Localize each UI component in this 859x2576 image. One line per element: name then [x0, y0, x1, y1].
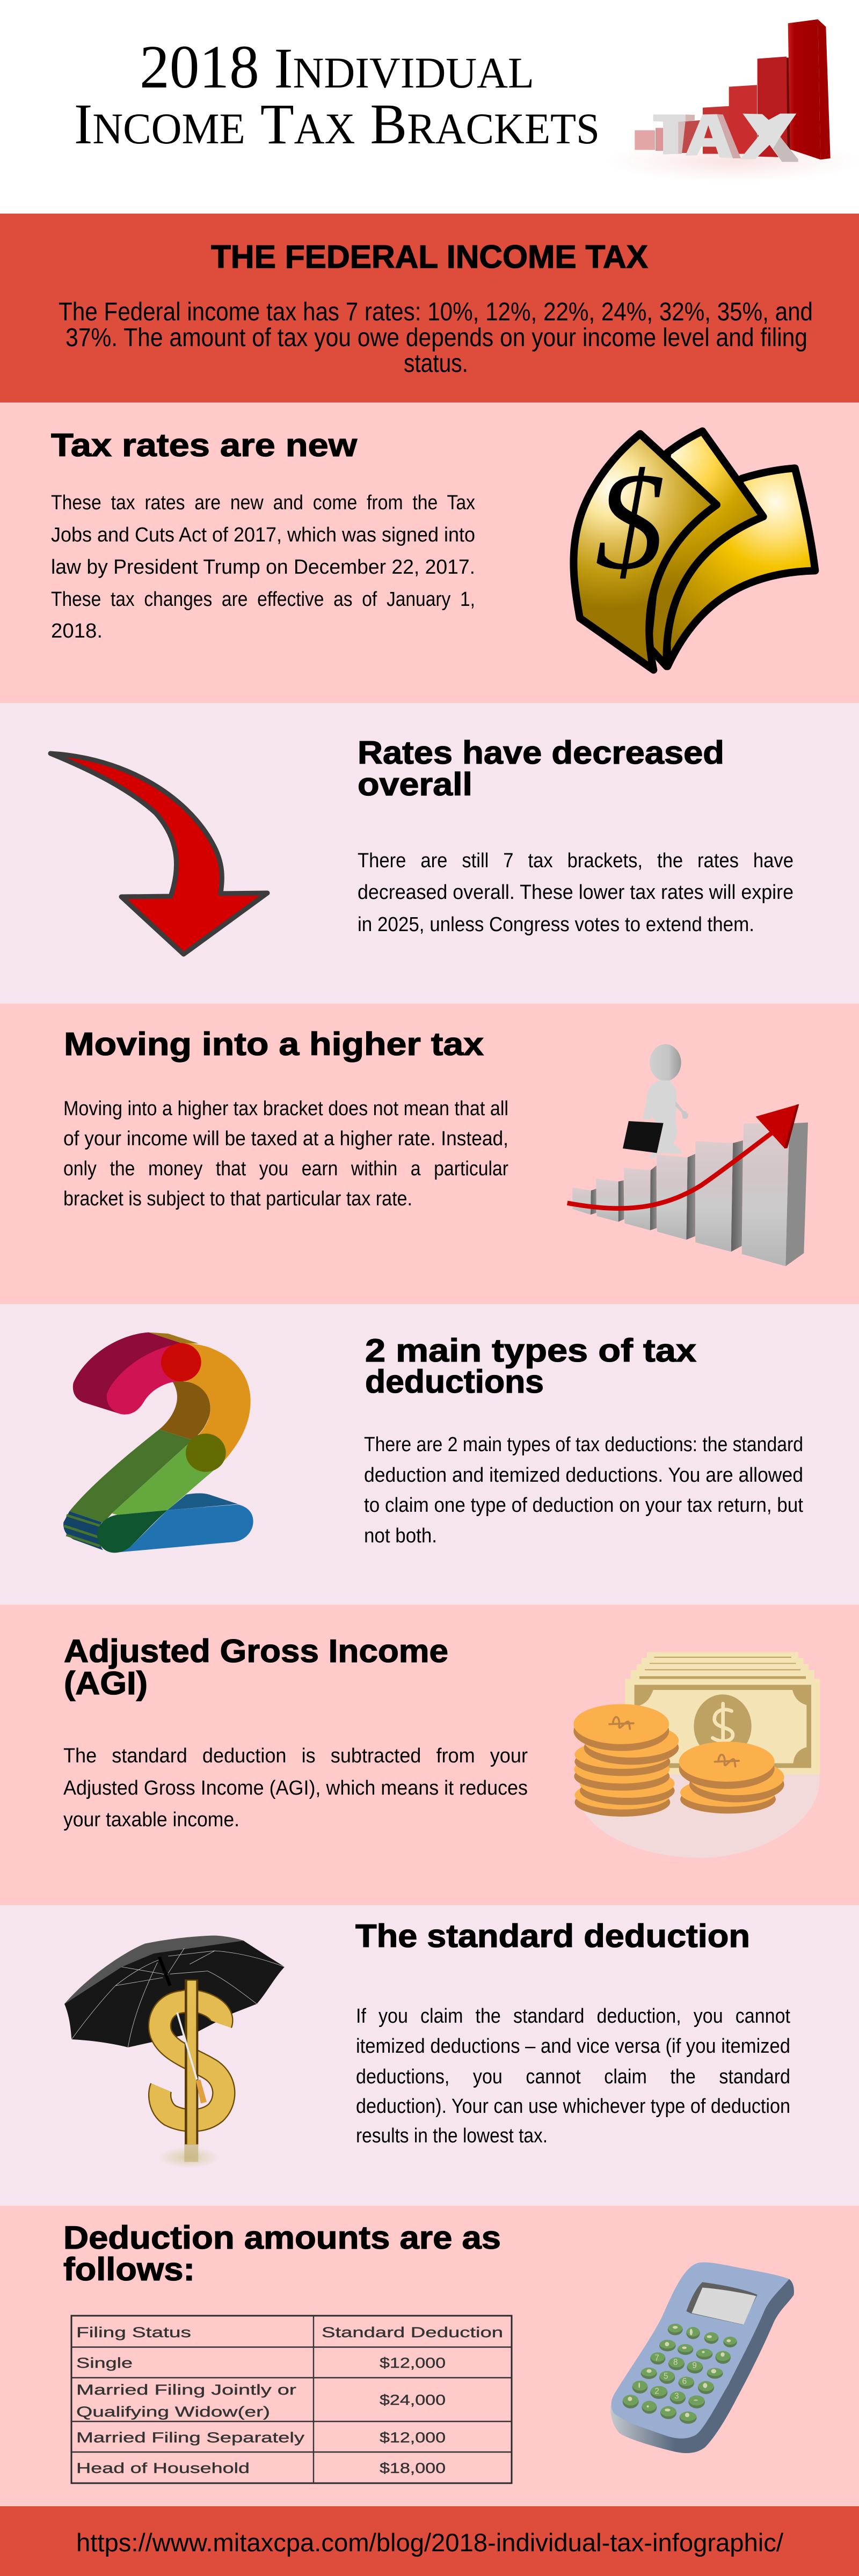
keypad symbols: 3 — [674, 2391, 679, 2401]
panel: rates have decreased overall — [0, 703, 859, 1004]
icon: colorful number 2 — [63, 1333, 253, 1553]
panel: deduction amounts — [0, 2206, 859, 2506]
heading: THE FEDERAL INCOME TAX — [211, 239, 648, 275]
body text: of your income will be taxed at a higher rate. Instead, — [63, 1128, 508, 1150]
heading: Rates have decreased — [358, 735, 724, 771]
panel: moving into a higher tax — [0, 1004, 859, 1304]
heading: Deduction amounts are as — [63, 2220, 501, 2256]
body text — [63, 1745, 528, 1831]
figure — [643, 1044, 688, 1159]
body text: There are 2 main types of tax deductions: the standard — [364, 1433, 803, 1456]
heading — [358, 735, 724, 802]
table: standard deduction by filing status: Filing Status — [76, 2324, 191, 2340]
keypad — [623, 2324, 737, 2424]
heading: overall — [358, 766, 472, 802]
title: Income Tax Brackets — [74, 88, 600, 157]
body text — [51, 492, 475, 642]
icon: blue calculator — [610, 2263, 794, 2453]
body text: in 2025, unless Congress votes to extend them. — [358, 913, 754, 936]
keypad symbols — [628, 2326, 731, 2417]
keypad symbols: 6 — [682, 2377, 687, 2386]
heading: Adjusted Gross Income — [64, 1633, 448, 1669]
banknotes — [625, 1652, 820, 1774]
red growth arrow — [567, 1104, 799, 1209]
table: standard deduction by filing status: $12,000 — [380, 2429, 446, 2446]
left coin stack — [573, 1704, 679, 1817]
body text: Jobs and Cuts Act of 2017, which was signed into — [51, 524, 475, 546]
icon: umbrella over gold dollar sign — [64, 1936, 285, 2168]
panel: footer — [0, 2506, 859, 2576]
keypad symbols: 8 — [673, 2358, 678, 2367]
title — [74, 32, 600, 157]
panel: header — [0, 0, 859, 214]
body text: Moving into a higher tax bracket does not mean that all — [63, 1097, 508, 1120]
keypad symbols: 2 — [654, 2387, 659, 2396]
body text: law by President Trump on December 22, 2017. — [51, 556, 475, 579]
icon: TAX bar chart — [605, 19, 859, 182]
panel: the standard deduction — [0, 1905, 859, 2206]
table: standard deduction by filing status: Standard Deduction — [322, 2324, 503, 2340]
body text: The standard deduction is subtracted from your — [63, 1745, 528, 1767]
body text: deduction and itemized deductions. You are allowed — [364, 1464, 803, 1487]
heading: (AGI) — [64, 1665, 148, 1701]
heading: The standard deduction — [355, 1918, 750, 1954]
panel: adjusted gross income — [0, 1605, 859, 1905]
icon part: letter X — [740, 114, 798, 162]
panel: the federal income tax — [0, 214, 859, 402]
body text: These tax rates are new and come from the Tax — [51, 492, 475, 514]
body text: deductions, you cannot claim the standard — [356, 2066, 790, 2088]
heading: Moving into a higher tax — [64, 1026, 484, 1062]
body text: These tax changes are effective as of January 1, — [51, 588, 475, 611]
table: standard deduction by filing status: $12,000 — [380, 2355, 446, 2371]
table: standard deduction by filing status — [71, 2316, 512, 2483]
table: standard deduction by filing status: $18,000 — [380, 2460, 446, 2476]
table: standard deduction by filing status: Head of Household — [76, 2460, 250, 2476]
gold dollar sign — [159, 1979, 224, 2145]
table: standard deduction by filing status: Married Filing Jointly or — [76, 2382, 296, 2398]
body text: not both. — [364, 1525, 437, 1547]
heading: deductions — [365, 1364, 544, 1400]
heading: Tax rates are new — [51, 427, 357, 463]
body text: results in the lowest tax. — [356, 2125, 548, 2147]
icon: figure climbing bar chart with red arrow — [567, 1044, 808, 1266]
heading — [365, 1333, 696, 1400]
heading — [63, 2220, 501, 2287]
table: standard deduction by filing status: Single — [76, 2355, 133, 2371]
icon: gold dollar bills — [573, 431, 815, 670]
body text — [63, 1097, 508, 1210]
body text: bracket is subject to that particular tax rate. — [63, 1188, 412, 1210]
panel: 2 main types of tax deductions — [0, 1304, 859, 1605]
heading — [64, 1633, 448, 1701]
body text: to claim one type of deduction on your tax return, but — [364, 1494, 803, 1517]
briefcase — [623, 1121, 664, 1153]
intro text — [59, 298, 813, 378]
heading: follows: — [63, 2251, 195, 2287]
keypad symbols: 9 — [692, 2361, 697, 2370]
body text: 2018. — [51, 620, 103, 642]
body text: There are still 7 tax brackets, the rates have — [358, 850, 794, 872]
umbrella handle — [177, 2012, 207, 2103]
source url: https://www.mitaxcpa.com/blog/2018-individual-tax-infographic/ — [76, 2528, 784, 2557]
dollar sign: $ — [595, 444, 665, 598]
keypad symbols: 5 — [664, 2372, 668, 2381]
body text: If you claim the standard deduction, you cannot — [356, 2005, 790, 2028]
icon part: letter T — [653, 114, 695, 155]
icon: red down arrow — [50, 753, 267, 954]
panel: tax rates are new — [0, 402, 859, 703]
heading: 2 main types of tax — [365, 1333, 696, 1368]
intro text: status. — [404, 349, 468, 378]
screen — [686, 2282, 758, 2325]
table: standard deduction by filing status: Qualifying Widow(er) — [76, 2404, 270, 2420]
title: 2018 Individual — [140, 32, 534, 101]
keypad symbols: 7 — [654, 2354, 659, 2363]
icon: banknotes and coin stacks — [573, 1652, 820, 1858]
body text — [358, 850, 794, 936]
table: standard deduction by filing status: $24,000 — [380, 2392, 446, 2408]
icon part: letter A — [686, 114, 741, 158]
body text — [356, 2005, 790, 2147]
table: standard deduction by filing status: Married Filing Separately — [76, 2429, 305, 2446]
body text: your taxable income. — [63, 1809, 239, 1831]
body text — [364, 1433, 803, 1547]
right coin stack — [679, 1741, 784, 1813]
body text: only the money that you earn within a particular — [63, 1158, 508, 1180]
body text: deduction). Your can use whichever type of deduction — [356, 2095, 790, 2118]
body text: itemized deductions – and vice versa (if you itemized — [356, 2035, 790, 2058]
body text: Adjusted Gross Income (AGI), which means it reduces — [63, 1777, 528, 1799]
body text: decreased overall. These lower tax rates will expire — [358, 881, 794, 904]
